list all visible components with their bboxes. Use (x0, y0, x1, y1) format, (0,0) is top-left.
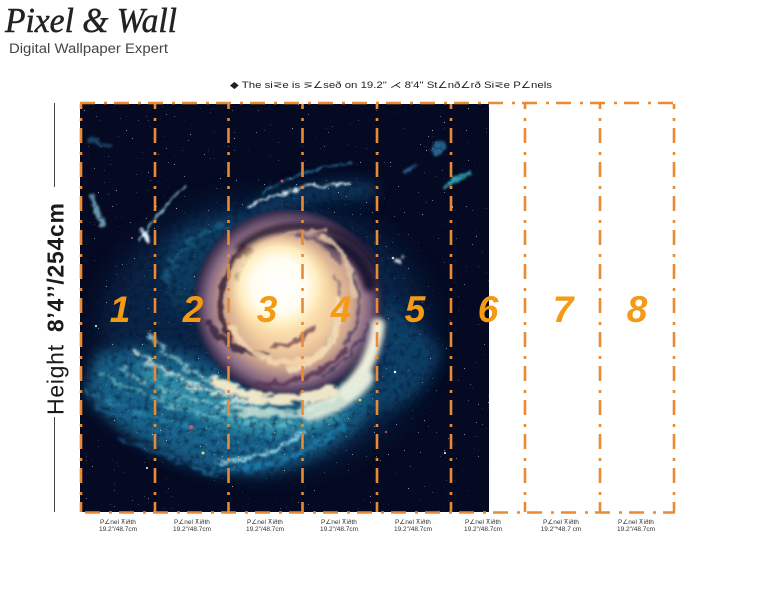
height line bottom (54, 417, 56, 512)
panel width labels: P∠nel ⊼iðth (321, 518, 357, 526)
panel width labels: P∠nel ⊼iðth (395, 518, 431, 526)
dust grain texture (86, 136, 471, 477)
star field (80, 104, 489, 512)
top edge (80, 102, 675, 104)
panel width labels: P∠nel ⊼iðth (174, 518, 210, 526)
panel width labels: P∠nel ⊼iðth (543, 518, 579, 526)
dark dust lanes (208, 226, 374, 384)
white lower arm (215, 325, 378, 414)
logo tagline: Digital Wallpaper Expert (9, 41, 168, 56)
bottom edge (80, 511, 675, 514)
panel numbers: 1 (110, 289, 130, 330)
logo (4, 1, 177, 56)
galaxy image (80, 104, 489, 512)
panel width labels: 19.2"/48.7cm (173, 526, 211, 533)
panel width labels: P∠nel ⊼iðth (618, 518, 654, 526)
star cluster (95, 206, 453, 469)
panel width labels: 19.2"/48.7cm (464, 526, 502, 533)
galaxy warm disc (191, 209, 385, 397)
panel numbers (110, 289, 648, 330)
panel width labels: P∠nel ⊼iðth (247, 518, 283, 526)
logo script wordmark: Pixel & Wall (4, 1, 177, 40)
blue arm streaks (88, 140, 470, 471)
size note heading: ◆ The si⋜e is ⋝∠seð on 19.2" ⋌ 8'4" St∠nð∠rð Si⋜e P∠nels (230, 80, 552, 91)
panel width labels (99, 518, 655, 533)
panel grid: orange dash-dot outlines (80, 103, 675, 512)
panel width labels: P∠nel ⊼iðth (465, 518, 501, 526)
panel dividers (81, 104, 674, 512)
galaxy bright core (226, 233, 326, 332)
panel width labels: 19.2"/48.7cm (617, 526, 655, 533)
space background (80, 104, 489, 512)
blue nebula haze (85, 181, 442, 473)
panel numbers: 4 (330, 289, 351, 330)
panel width labels: 19.2"*48.7 cm (541, 526, 581, 533)
panel width labels: 19.2"/48.7cm (394, 526, 432, 533)
light swirl strands (228, 231, 352, 370)
panel numbers: 8 (627, 289, 648, 330)
panel numbers: 7 (553, 289, 576, 330)
panel width labels: 19.2"/48.7cm (99, 526, 137, 533)
coloured stars (131, 180, 387, 454)
panel numbers: 3 (257, 289, 278, 330)
panel width labels: 19.2"/48.7cm (320, 526, 358, 533)
panel numbers: 5 (405, 289, 427, 330)
panel width labels: 19.2"/48.7cm (246, 526, 284, 533)
panel width labels: P∠nel ⊼iðth (100, 518, 136, 526)
height label: Height 8’4’’/254cm (42, 203, 68, 415)
panel numbers: 6 (478, 289, 499, 330)
height line top (54, 103, 56, 187)
panel numbers: 2 (182, 289, 204, 330)
